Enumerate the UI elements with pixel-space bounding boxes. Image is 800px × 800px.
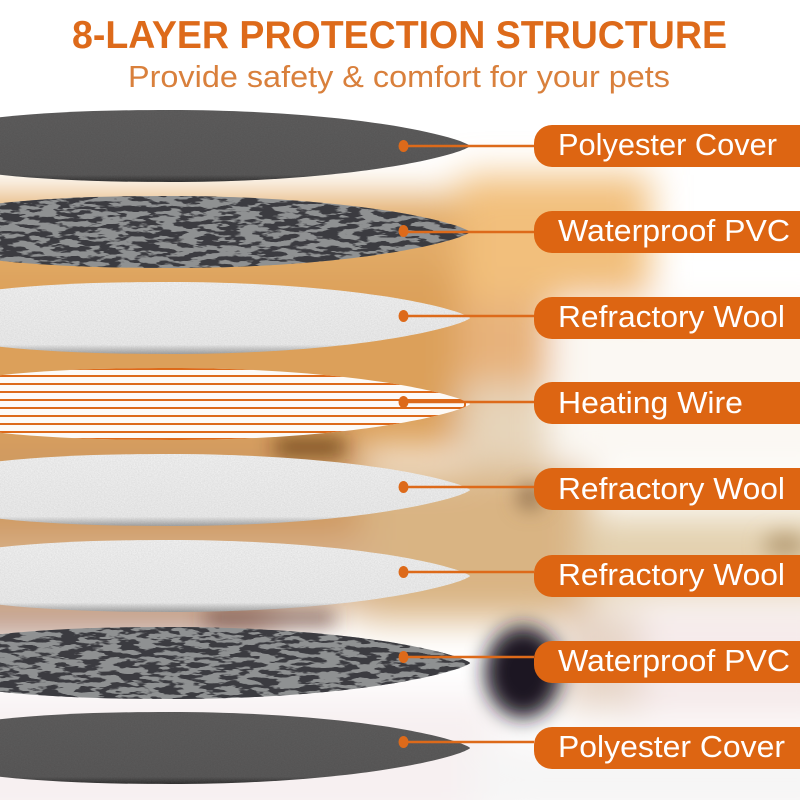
layer 5: refractory wool: Refractory Wool: [558, 471, 785, 506]
layer 2: waterproof PVC: [0, 196, 800, 268]
layer 4: heating wire: Heating Wire: [558, 385, 743, 420]
title: 8-LAYER PROTECTION STRUCTURE: [72, 14, 727, 57]
layer 6: refractory wool: [0, 540, 800, 612]
layer 8: polyester cover: Polyester Cover: [558, 729, 785, 764]
layer 5: refractory wool: [0, 454, 800, 526]
layer 1: polyester cover: Polyester Cover: [558, 127, 777, 162]
layer 7: waterproof PVC: [0, 627, 800, 699]
layer 2: waterproof PVC: Waterproof PVC: [558, 213, 790, 248]
layer 8: polyester cover: [0, 712, 800, 784]
layer 1: polyester cover: [0, 110, 800, 182]
layer 6: refractory wool: Refractory Wool: [558, 557, 785, 592]
layer 7: waterproof PVC: Waterproof PVC: [558, 643, 790, 678]
layer 3: refractory wool: [0, 282, 800, 354]
subtitle: Provide safety & comfort for your pets: [128, 59, 670, 94]
layer 4: heating wire: [0, 368, 800, 440]
layer 3: refractory wool: Refractory Wool: [558, 299, 785, 334]
